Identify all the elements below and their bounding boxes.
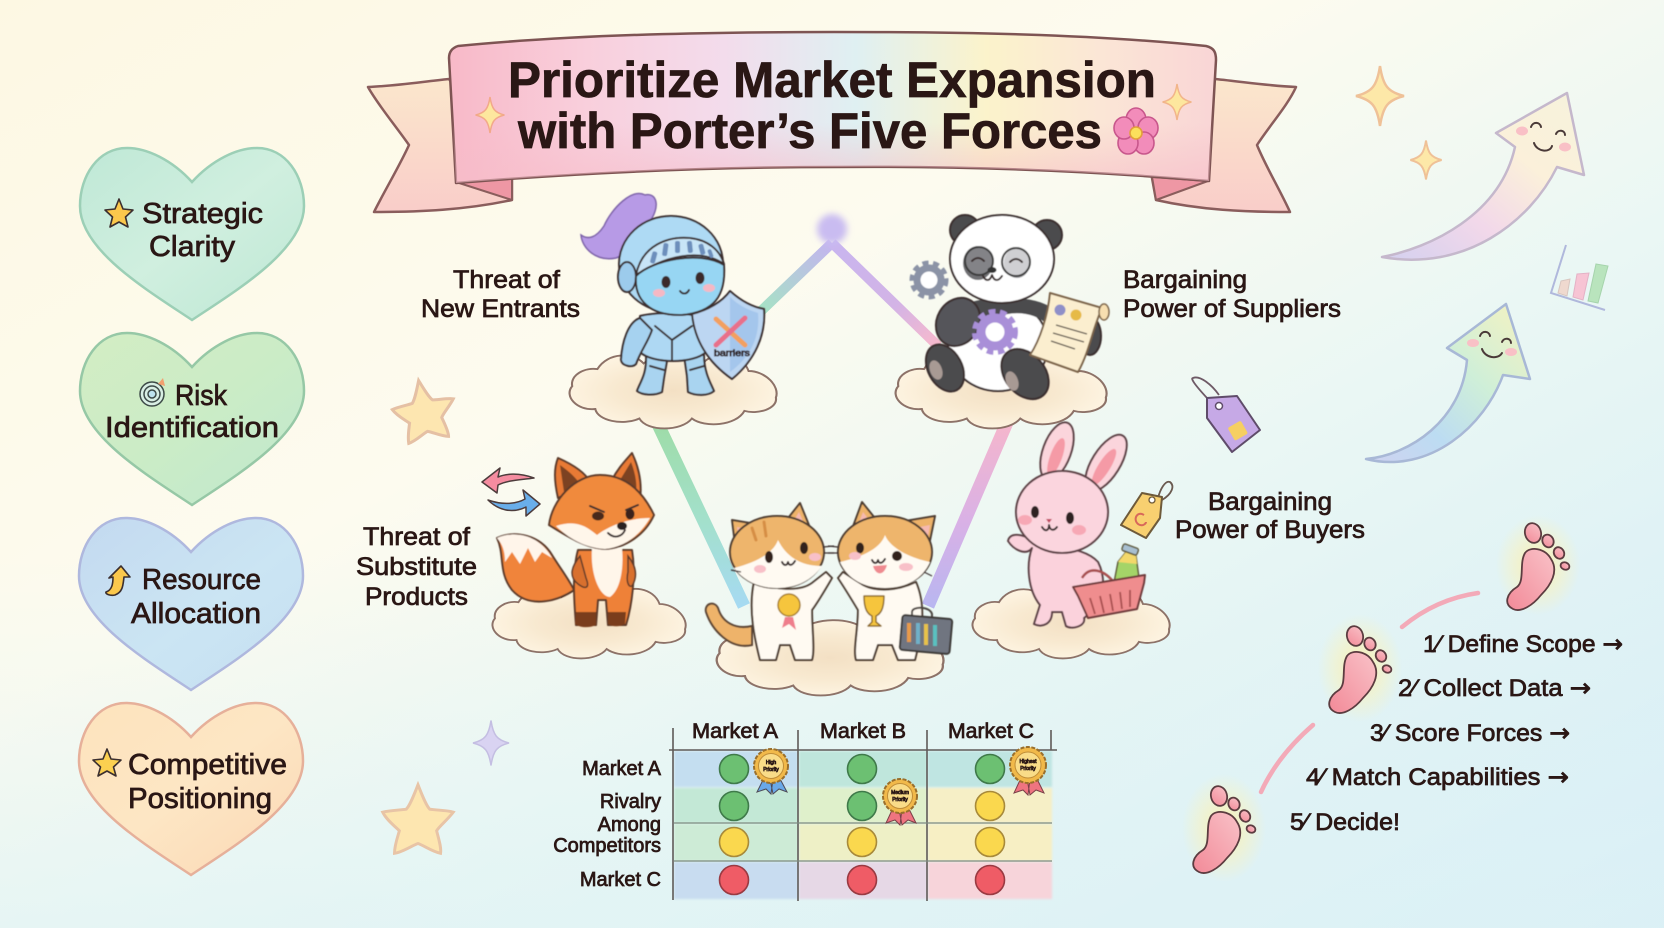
bottle: [1113, 552, 1139, 588]
scroll: [1030, 293, 1102, 372]
panda character: [912, 215, 1109, 408]
icon: purple price tag: [1192, 377, 1260, 452]
sparkle small: [1410, 140, 1442, 180]
heart: strategic clarity: [80, 148, 304, 320]
cats character pair: [706, 502, 952, 660]
body: [948, 299, 1048, 391]
tail: [497, 534, 574, 602]
icon: medal: [778, 594, 800, 630]
label: [421, 266, 580, 323]
force: rivalry among competitors: [706, 502, 952, 695]
cat 1 head: [730, 516, 824, 588]
step 3: 3⁄ Score Forces →: [1370, 718, 1570, 747]
apex glow: [817, 214, 847, 244]
step 2: 2⁄ Collect Data →: [1398, 673, 1591, 702]
face: [592, 512, 604, 520]
footprint top: [1496, 515, 1580, 615]
row labels: Among: [598, 814, 661, 836]
traffic light dots: [720, 754, 1004, 894]
nose and mouth: [988, 267, 996, 273]
cloud: [570, 353, 777, 428]
icon: star: [105, 199, 133, 227]
line: apex to new entrants: [760, 243, 832, 312]
head: [549, 475, 654, 549]
arm: [621, 318, 652, 366]
medal: high priority: High: [766, 760, 776, 766]
heart: resource allocation: [79, 518, 303, 690]
cloud: [492, 587, 686, 658]
medal: highest priority: Priority: [1020, 766, 1036, 772]
label: Strategic: [142, 198, 263, 230]
ears: [950, 215, 980, 245]
banner folds: [456, 177, 1208, 200]
row labels: Competitors: [553, 835, 661, 857]
footprint middle: [1318, 614, 1402, 722]
label: [356, 523, 477, 611]
armor body: [640, 313, 706, 361]
medal: medium priority: Priority: [892, 797, 908, 803]
cat 2 head: [838, 516, 932, 588]
body: [574, 550, 634, 625]
cat 1 tail: [706, 604, 752, 646]
label: Threat of: [453, 266, 560, 294]
banner main ribbon: [449, 32, 1216, 183]
medal: high priority: [754, 749, 788, 794]
label: [1175, 488, 1365, 544]
step 4: 4⁄ Match Capabilities →: [1306, 762, 1569, 791]
legs: [918, 338, 972, 398]
cloud: [972, 587, 1170, 658]
rabbit character: [1008, 418, 1145, 628]
label: Threat of: [363, 523, 470, 551]
five forces connector lines: [656, 214, 1008, 606]
force: threat of substitute products: [356, 453, 686, 658]
traffic light matrix: [553, 720, 1057, 901]
connector dashes: [1261, 593, 1478, 792]
cloud: [717, 620, 943, 695]
label line 2: Allocation: [131, 598, 261, 630]
force: bargaining power of buyers: [972, 377, 1365, 658]
label: Substitute: [356, 553, 477, 581]
icon: yellow price tag: [1121, 482, 1172, 538]
title banner: [368, 32, 1296, 212]
column headers: Market A: [692, 720, 778, 743]
label line 2: Identification: [105, 412, 279, 444]
body: [1008, 535, 1103, 628]
banner right tail: [1152, 79, 1296, 212]
icon: flower: [1114, 108, 1158, 154]
label: Bargaining: [1123, 266, 1247, 294]
label: Risk: [175, 380, 227, 412]
icon: crossed bars: [716, 319, 745, 345]
fox character: [497, 453, 654, 627]
row labels: Market C: [580, 869, 661, 891]
knight character: [581, 194, 764, 395]
icon: up arrow: [106, 566, 130, 595]
label: Power of Buyers: [1175, 516, 1365, 544]
label: Power of Suppliers: [1123, 295, 1341, 323]
banner left tail: [368, 79, 512, 212]
cat 1 body: [752, 572, 832, 660]
icon: toolbox: [900, 608, 952, 654]
line: suppliers to rivalry: [928, 420, 1008, 606]
head: [1016, 471, 1108, 553]
left arm: [927, 290, 989, 354]
ears: [1034, 418, 1080, 484]
matrix cell fills: [674, 751, 1052, 899]
step 5: 5⁄ Decide!: [1290, 809, 1400, 836]
label: [1123, 266, 1341, 323]
smiling arrow upper: [1382, 93, 1584, 260]
line: apex to suppliers: [832, 243, 938, 346]
shield text: barriers: [714, 348, 751, 358]
title line 2: with Porter’s Five Forces: [517, 103, 1102, 159]
medal: high priority: Priority: [763, 767, 779, 773]
label: Bargaining: [1208, 488, 1332, 516]
icon: star: [93, 749, 121, 776]
plume: [581, 194, 656, 259]
column headers: Market B: [820, 720, 906, 743]
sparkle large: [1356, 66, 1404, 126]
icon: mini bar chart: [1551, 245, 1608, 310]
force: bargaining power of suppliers: [896, 215, 1341, 428]
arms: [572, 556, 635, 587]
icon: trophy: [864, 596, 884, 626]
label line 2: Positioning: [128, 783, 272, 815]
left banner sparkle: [476, 97, 504, 133]
row labels: Rivalry: [600, 791, 661, 813]
face: [636, 258, 724, 315]
step 1: 1⁄ Define Scope →: [1423, 629, 1623, 658]
head: [950, 215, 1054, 303]
process steps path: [1182, 515, 1623, 882]
right arm: [1079, 317, 1101, 355]
matrix grid: [669, 728, 1057, 901]
visor band: [636, 238, 724, 275]
ears: [555, 453, 641, 500]
row labels: Market A: [582, 758, 662, 780]
medal: highest priority: Highest: [1020, 759, 1037, 765]
shield: [692, 291, 764, 379]
visor slits: [650, 241, 714, 264]
medal: medium priority: Medium: [891, 790, 909, 796]
icon: purple gear: [975, 312, 1015, 352]
helmet: [619, 216, 723, 312]
cat 2 body: [838, 572, 922, 660]
basket: [1082, 570, 1115, 584]
cat 2 ears: [848, 502, 935, 550]
cloud: [896, 353, 1107, 428]
rising arrows: [1356, 66, 1608, 462]
cat 1 ears: [732, 503, 815, 552]
row labels: [553, 758, 662, 891]
label line 2: Clarity: [149, 231, 236, 263]
feet: [575, 612, 626, 627]
column headers: Market C: [948, 720, 1034, 743]
panel: benefit hearts: [79, 148, 304, 875]
right banner sparkle: [1163, 84, 1191, 120]
medal: highest priority: [1010, 747, 1046, 795]
eye patches and glasses: [963, 246, 993, 280]
icon: target: [140, 378, 165, 406]
decorative stars: [383, 375, 509, 853]
medal: medium priority: [883, 779, 917, 825]
column headers: [692, 720, 1034, 743]
label: Products: [365, 583, 468, 611]
heart: risk identification: [80, 333, 304, 505]
force: threat of new entrants: [421, 194, 777, 428]
line: entrants to rivalry: [656, 420, 744, 606]
label: Resource: [142, 564, 261, 596]
title line 1: Prioritize Market Expansion: [508, 52, 1156, 108]
icon: grey gear: [912, 263, 946, 297]
legs: [637, 355, 714, 395]
icon: swap arrows: [482, 468, 540, 516]
smiling arrow lower: [1366, 304, 1530, 462]
label: New Entrants: [421, 295, 580, 323]
label: Competitive: [128, 749, 287, 781]
heart: competitive positioning: [79, 703, 303, 875]
footprint bottom: [1182, 774, 1266, 882]
